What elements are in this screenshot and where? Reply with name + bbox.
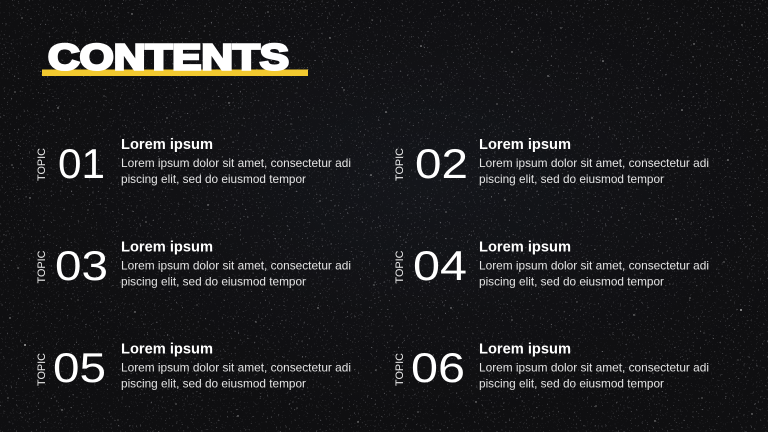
topic 04 — [394, 240, 709, 289]
topic 06: Lorem ipsum — [479, 342, 571, 358]
topic 03 — [36, 240, 351, 289]
topic 03: piscing elit, sed do eiusmod tempor — [121, 274, 306, 288]
title underline — [42, 70, 308, 76]
topic 02: 02 — [415, 140, 468, 187]
title text: CONTENTS — [48, 36, 289, 78]
topic 01: piscing elit, sed do eiusmod tempor — [121, 172, 306, 186]
topic 02: TOPIC — [394, 148, 406, 181]
topic 06: Lorem ipsum dolor sit amet, consectetur adi — [479, 360, 709, 374]
topic 01: Lorem ipsum — [121, 137, 213, 153]
topic 04: Lorem ipsum dolor sit amet, consectetur adi — [479, 258, 709, 272]
topic 06: TOPIC — [394, 353, 406, 386]
topic 01 — [36, 137, 351, 187]
topic 06: piscing elit, sed do eiusmod tempor — [479, 376, 664, 390]
topic 03: 03 — [55, 242, 108, 289]
topic 02: piscing elit, sed do eiusmod tempor — [479, 172, 664, 186]
topic 02: Lorem ipsum dolor sit amet, consectetur adi — [479, 156, 709, 170]
topic 05: 05 — [53, 344, 106, 391]
topic 04: 04 — [413, 242, 467, 289]
topic 06 — [394, 342, 709, 391]
topic 01: 01 — [58, 140, 105, 187]
topic 03: Lorem ipsum — [121, 240, 213, 256]
topic 01: TOPIC — [36, 148, 48, 181]
topic 04: TOPIC — [394, 250, 406, 284]
topic 05: piscing elit, sed do eiusmod tempor — [121, 376, 306, 390]
topic 04: Lorem ipsum — [479, 240, 571, 256]
topic 01: Lorem ipsum dolor sit amet, consectetur adi — [121, 156, 351, 170]
topic 06: 06 — [411, 344, 465, 391]
topic 05: Lorem ipsum dolor sit amet, consectetur adi — [121, 360, 351, 374]
topic 03: Lorem ipsum dolor sit amet, consectetur adi — [121, 258, 351, 272]
topic 05 — [36, 342, 351, 391]
topic 03: TOPIC — [36, 250, 48, 284]
topic 02: Lorem ipsum — [479, 137, 571, 153]
title: contents — [42, 36, 308, 78]
topic 05: Lorem ipsum — [121, 342, 213, 358]
topic 02 — [394, 137, 709, 187]
topic 05: TOPIC — [36, 353, 48, 386]
topic 04: piscing elit, sed do eiusmod tempor — [479, 274, 664, 288]
